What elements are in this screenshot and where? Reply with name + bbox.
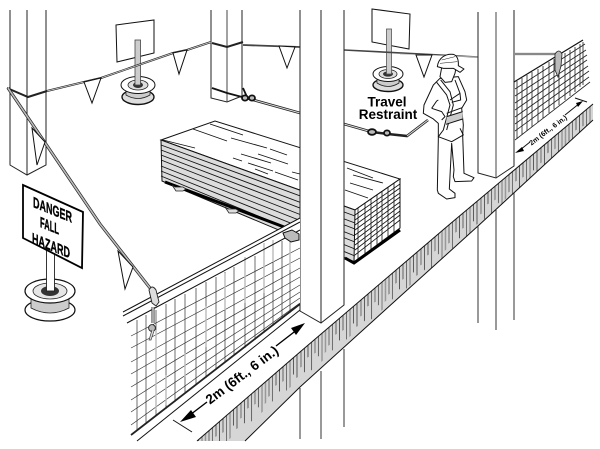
sign and base: back right: [372, 9, 410, 92]
rope: diagonal warning line: [8, 88, 150, 288]
safety net: foreground: [123, 218, 300, 441]
columns below the slab: [300, 193, 514, 439]
dimension: right net width: [515, 98, 587, 153]
worker body: [423, 77, 474, 199]
column: back left: [10, 10, 46, 175]
dimension: foreground net width: 2m (6ft., 6 in.): [203, 343, 281, 407]
worker in harness: [423, 54, 474, 199]
worker helmet: [437, 54, 464, 72]
flag: warning pennant 4: [416, 55, 432, 77]
flag: warning pennant 3: [279, 46, 295, 68]
slab edge with hatching: [197, 104, 593, 441]
hook and tensioner on net rail: [149, 287, 159, 340]
column: back centre: [211, 10, 242, 102]
flag: pennant on diagonal rope: [118, 251, 133, 289]
worker harness: [432, 80, 463, 142]
label: travel restraint: Restraint: [359, 107, 418, 122]
safety net: right side: [514, 40, 590, 140]
rope: travel restraint anchor line: [212, 88, 428, 136]
label: travel restraint: [359, 94, 418, 122]
flag: pennant on column: [32, 128, 45, 165]
flag: warning pennant 2: [173, 50, 187, 74]
column: front right: [478, 10, 514, 178]
sign: danger fall hazard: [23, 185, 83, 321]
sign: danger fall hazard: HAZARD: [32, 231, 70, 262]
material stack on pallet: [161, 121, 400, 263]
worker head: [440, 68, 456, 82]
sign: danger fall hazard: FALL: [40, 215, 59, 239]
sign: danger fall hazard: DANGER: [33, 195, 72, 227]
flag: warning pennant 1: [84, 78, 101, 103]
dimension: right net width: 2m (6ft., 6 in.): [528, 114, 569, 147]
column: front centre: [300, 10, 344, 323]
label: travel restraint: Travel: [367, 94, 407, 110]
sign and base: back left: [116, 20, 155, 104]
rope: upper warning line, right: [344, 50, 478, 57]
rope: upper warning line, left: [7, 42, 300, 97]
dimension: foreground net width: [173, 323, 305, 432]
